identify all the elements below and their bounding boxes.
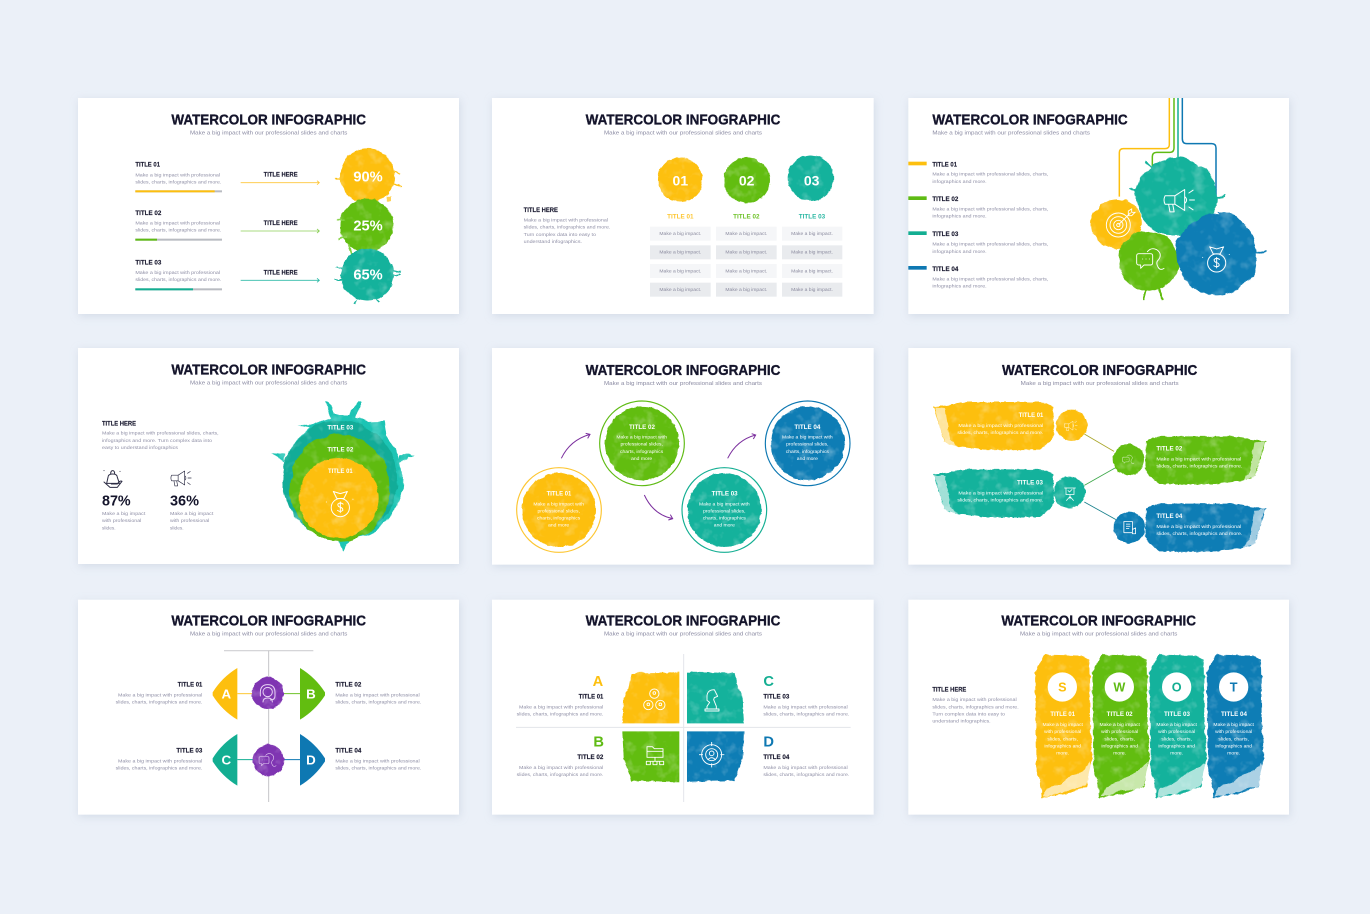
text block: title 02: slides, charts, infographics and more. [135,228,221,234]
column S: more. [1056,751,1069,757]
text block: title here: TITLE HERE [102,421,136,427]
text block: title 02: Make a big impact with professional [135,221,220,227]
text block: title 01: TITLE 01 [135,163,161,169]
stat: 36% [170,471,214,531]
brush: title 01: Make a big impact with professional [958,423,1043,429]
text block: title 03: slides, charts, infographics and more. [135,277,221,283]
stat: 87%: 87% [102,493,131,509]
circle: title 01: professional slides, [537,508,580,514]
layered splash chart [271,401,415,552]
column S: slides, charts, [1047,736,1078,742]
circle: title 04: charts, infographics [786,449,829,455]
brush: title 02: Make a big impact with professional [1156,457,1241,463]
circle: title 04 [765,401,850,486]
text: title 04: Make a big impact with professional [335,758,420,764]
panel: process circles [492,348,874,565]
splash: 90% [335,148,401,203]
splash: 25%: 25% [353,219,383,235]
circle: title 01: TITLE 01 [547,490,572,497]
column S [1035,655,1092,798]
legend 03: Make a big impact with professional slides, charts, [932,242,1048,248]
heading [171,362,366,386]
text block: title 01 [135,163,221,185]
progress bar 01 [135,190,222,192]
heading: Make a big impact with our professional slides and charts [604,631,762,637]
node: title 04 [1114,512,1145,543]
brush: title 02: TITLE 02 [1156,446,1183,453]
text: B: slides, charts, infographics and more. [517,772,603,778]
heading: WATERCOLOR INFOGRAPHIC [586,113,781,129]
heading: WATERCOLOR INFOGRAPHIC [171,613,366,629]
table cells: Make a big impact. [659,231,701,237]
text: D: slides, charts, infographics and more. [763,772,849,778]
splash: teal megaphone [1129,157,1225,236]
text: title 02 [335,682,421,705]
table cells: Make a big impact. [659,287,701,293]
text: title 03: TITLE 03 [176,748,203,754]
text: D: TITLE 04 [763,755,790,761]
text: A: A [593,674,604,690]
heading [586,113,781,137]
circle: title 02: and more [631,456,652,462]
circle: title 03: Make a big impact with [699,501,750,507]
column S: Make a big impact [1042,722,1084,728]
circle: title 03: professional slides, [703,508,746,514]
text block: title 01: slides, charts, infographics and more. [135,179,221,185]
heading: Make a big impact with our professional slides and charts [190,131,348,137]
text: title 01: slides, charts, infographics and more. [116,699,202,705]
column S: TITLE 01 [1050,711,1075,718]
brush: title 01 [933,402,1054,450]
circle: title 02: Make a big impact with [616,435,667,441]
text: C: slides, charts, infographics and more. [763,712,849,718]
axis lines [516,654,851,802]
shape: B [300,668,325,720]
legend 01: TITLE 01 [932,162,958,168]
column O: slides, charts, [1161,736,1192,742]
connector lines [1084,434,1116,520]
circle: title 01: Make a big impact with [533,501,584,507]
column W: TITLE 02 [1107,711,1133,718]
legend 02: infographics and more. [932,214,987,220]
column T [1207,655,1264,798]
text block: title here: Make a big impact with professional [932,697,1017,703]
text: title 04: TITLE 04 [335,748,362,754]
table cells: Make a big impact. [725,231,767,237]
arrow label 01: TITLE HERE [264,173,298,179]
column W: Make a big impact [1099,722,1141,728]
column 02 header: 02 [739,172,755,188]
arrow label 03 [241,270,319,282]
legend 01: infographics and more. [932,179,987,185]
legend 04: TITLE 04 [932,267,959,273]
stat: 36%: 36% [170,493,199,509]
column W: with professional [1101,729,1138,735]
splash: 65% [335,248,401,304]
circle: title 02: professional slides, [620,442,663,448]
text: D: D [763,735,774,751]
text: A: TITLE 01 [579,695,604,701]
text block: title 03: TITLE 03 [135,261,162,267]
heading: Make a big impact with our professional slides and charts [932,131,1090,137]
table cells: Make a big impact. [725,250,767,256]
column T: T [1230,681,1238,695]
splash: yellow target [1092,199,1141,249]
circle: title 04: TITLE 04 [794,424,821,431]
shape: D: D [306,753,316,768]
brush: title 04: Make a big impact with professional [1156,524,1241,530]
panel: SWOT columns [908,600,1289,815]
brush: title 03: TITLE 03 [1017,479,1043,486]
shape: A [213,668,237,720]
shape: C [213,734,237,786]
column 03 header: TITLE 03 [799,214,826,221]
heading [1002,363,1198,387]
panel: layered splash [78,348,459,564]
text: A: Make a big impact with professional [519,705,603,711]
column W: W [1113,681,1125,695]
column T: Make a big impact [1213,722,1254,728]
text: A: slides, charts, infographics and more. [517,712,603,718]
text: title 01 [116,682,203,705]
shape: A: A [222,687,232,702]
purple node: headset [252,677,284,709]
panel: quadrant squares [492,600,874,815]
stat: 36%: Make a big impact [170,511,214,517]
text: B [517,735,604,778]
column T: with professional [1215,729,1252,735]
square A [622,672,680,724]
column 01 header: 01 [673,172,688,188]
legend 04: infographics and more. [932,284,987,290]
text: C: C [763,674,774,690]
layer: teal title 03: TITLE 03 [327,425,354,432]
legend 02: Make a big impact with professional slides, charts, [932,207,1048,213]
text block: title 02 [135,211,221,234]
axis lines [224,651,313,802]
text block: title here [932,687,1019,725]
text: B: TITLE 02 [577,755,604,761]
text: title 03 [116,748,203,771]
splash: green chat [1118,231,1178,300]
legend 01: Make a big impact with professional slides, charts, [932,172,1048,178]
heading: WATERCOLOR INFOGRAPHIC [171,113,366,129]
node: title 03 [1054,477,1085,508]
column T: more. [1227,751,1240,757]
text: title 03: Make a big impact with professional [118,758,202,764]
column 01 header: TITLE 01 [667,214,694,221]
heading: WATERCOLOR INFOGRAPHIC [1001,613,1196,629]
table cells: Make a big impact. [659,268,701,274]
column T: slides, charts, [1218,736,1249,742]
layer: teal title 03 [282,420,397,540]
arrow label 03: TITLE HERE [264,270,298,276]
brush: title 01: slides, charts, infographics and more. [957,430,1043,436]
stat: 36%: slides. [170,525,184,531]
text block: title 03: Make a big impact with professional [135,270,220,276]
column S: S [1058,681,1067,695]
text: B: B [593,735,604,751]
table cells: Make a big impact. [725,287,767,293]
column W: more. [1113,751,1126,757]
text: C: Make a big impact with professional [763,705,848,711]
layer: green title 02 [290,435,390,541]
table cells: Make a big impact. [659,250,701,256]
column W: slides, charts, [1104,736,1135,742]
node: title 02 [1113,444,1144,475]
arrow: 03 to 04 [728,434,756,458]
text: title 04: slides, charts, infographics and more. [335,765,421,771]
text block: title here: Make a big impact with professional [524,218,608,224]
text: D [763,735,849,778]
table cells: Make a big impact. [791,231,833,237]
panel: brush strokes network [908,348,1291,565]
arrow: 02 to 03 [644,495,673,520]
text block: title here [524,208,610,245]
circle: title 02: charts, infographics [620,449,664,455]
arrow label 02: TITLE HERE [264,221,298,227]
legend 02: TITLE 02 [932,197,959,203]
text: title 02: slides, charts, infographics and more. [335,699,421,705]
brush: title 04: TITLE 04 [1156,513,1183,520]
progress bar 03 [135,288,222,290]
text block: title here: Make a big impact with professional slides, charts, [102,431,219,437]
text block: title here: understand infographics. [932,719,991,725]
legend 04: Make a big impact with professional slides, charts, [932,276,1048,282]
brush: title 03: slides, charts, infographics and more. [957,497,1043,503]
text block: title here: slides, charts, infographics and more. [524,225,610,231]
column O: more. [1170,751,1183,757]
circle: title 04: professional slides, [786,442,829,448]
layer: light teal [271,401,415,552]
text: A [517,674,604,718]
table cells: Make a big impact. [791,287,833,293]
heading [171,113,366,137]
legend 01 [908,162,1048,185]
circle: title 03: charts, infographics [703,516,746,522]
column O: O [1172,681,1182,695]
stat: 87%: Make a big impact [102,511,146,517]
column T: infographics and [1215,744,1252,750]
heading [932,113,1128,137]
column 02 header: TITLE 02 [733,214,760,221]
circle: title 02 [600,401,684,486]
text: title 02: Make a big impact with professional [335,692,420,698]
heading: WATERCOLOR INFOGRAPHIC [171,362,366,378]
heading: WATERCOLOR INFOGRAPHIC [1002,363,1198,379]
brush: title 01: TITLE 01 [1019,412,1044,419]
progress bar 02 [135,239,222,241]
heading: Make a big impact with our professional slides and charts [604,381,762,387]
panel: percentage splashes [78,98,459,314]
legend 03 [908,231,1048,255]
column 02 header [724,157,770,221]
stat: 36%: with professional [170,518,209,524]
text block: title here: Turn complex data into easy to [932,711,1005,717]
arrow label 01 [241,173,319,185]
text block: title here [102,421,219,451]
heading [586,613,781,637]
text: title 01: Make a big impact with professional [118,692,202,698]
text: C [763,674,849,718]
column S: with professional [1044,729,1081,735]
heading [586,363,781,387]
column 03 header: 03 [804,172,820,188]
column O [1149,655,1207,798]
arrow label 02 [241,221,319,233]
text block: title here: TITLE HERE [524,208,558,214]
heading: Make a big impact with our professional slides and charts [604,131,762,137]
table cells: Make a big impact. [725,268,767,274]
circle: title 01: and more [548,523,569,529]
text block: title here: infographics and more. Turn complex data into [102,438,212,444]
text block: title 01: Make a big impact with professional [135,172,220,178]
heading [171,613,366,637]
text block: title 02: TITLE 02 [135,211,162,217]
column O: infographics and [1158,744,1195,750]
stat: 87%: slides. [102,525,116,531]
splash: 65%: 65% [353,268,383,284]
circle: title 04: and more [797,456,818,462]
stat: 87% [102,471,146,531]
column O: Make a big impact [1156,722,1197,728]
column 03 header [788,155,834,221]
layer: yellow title 01: TITLE 01 [328,468,353,475]
legend 02 [908,196,1048,220]
column O: TITLE 03 [1164,711,1190,718]
column W: infographics and [1101,744,1138,750]
text: title 04 [335,748,421,771]
table cells [650,227,842,297]
circle: title 03: TITLE 03 [712,490,738,497]
circle: title 04: Make a big impact with [782,435,833,441]
circle: title 01 [517,468,601,552]
splash: 25% [336,199,393,255]
text: title 01: TITLE 01 [178,682,203,688]
legend 03: TITLE 03 [932,232,959,238]
table cells: Make a big impact. [791,268,833,274]
text block: title 03 [135,261,221,283]
column O: with professional [1158,729,1195,735]
heading: Make a big impact with our professional slides and charts [1021,381,1179,387]
heading: WATERCOLOR INFOGRAPHIC [586,363,781,379]
text block: title here: understand infographics. [524,239,582,245]
circle: title 02: TITLE 02 [629,424,655,431]
brush: title 02 [1145,436,1266,484]
circle: title 03 [682,468,767,552]
brush: title 04 [1145,504,1266,551]
legend 03: infographics and more. [932,249,987,255]
heading: Make a big impact with our professional slides and charts [1020,631,1178,637]
arrow: 01 to 02 [561,433,590,458]
purple node: chat [253,745,284,776]
column W [1092,655,1150,798]
brush: title 03 [933,469,1054,517]
shape: C: C [222,753,232,768]
splash: 90%: 90% [353,169,383,185]
square B [622,731,680,783]
node: title 01 [1056,410,1087,441]
column 01 header [658,157,703,221]
brush: title 04: slides, charts, infographics and more. [1156,531,1242,537]
layer: green title 02: TITLE 02 [327,446,354,453]
heading: Make a big impact with our professional slides and charts [190,631,348,637]
text block: title here: Turn complex data into easy to [524,232,596,238]
connector lines [237,694,300,760]
shape: D [300,734,325,786]
column T: TITLE 04 [1221,711,1247,718]
brush: title 03: Make a big impact with professional [958,490,1043,496]
panel: numbered table [492,98,874,314]
text block: title here: slides, charts, infographics and more. [932,704,1019,710]
splash: blue money bag [1176,213,1265,295]
layer: yellow title 01 [299,458,379,538]
circle: title 03: and more [714,523,735,529]
square C [687,671,744,724]
circle: title 01: charts, infographics [537,516,581,522]
text block: title here: easy to understand infographics [102,445,179,451]
text block: title here: TITLE HERE [932,687,966,693]
text: D: Make a big impact with professional [763,765,848,771]
square D [687,731,744,783]
shape: B: B [306,687,316,702]
heading: WATERCOLOR INFOGRAPHIC [586,613,781,629]
stat: 87%: with professional [102,518,141,524]
panel: splash cluster [908,98,1289,314]
text: title 03: slides, charts, infographics and more. [116,765,202,771]
heading [1001,613,1196,637]
heading: Make a big impact with our professional slides and charts [190,380,348,386]
table cells: Make a big impact. [791,250,833,256]
text: B: Make a big impact with professional [519,765,603,771]
connector lines [1119,98,1216,198]
text: title 02: TITLE 02 [335,682,362,688]
panel: ABCD arrows [78,600,459,815]
column S: infographics and [1044,744,1081,750]
brush: title 02: slides, charts, infographics and more. [1156,464,1242,470]
heading: WATERCOLOR INFOGRAPHIC [932,113,1128,129]
text: C: TITLE 03 [763,695,790,701]
legend 04 [908,266,1048,290]
